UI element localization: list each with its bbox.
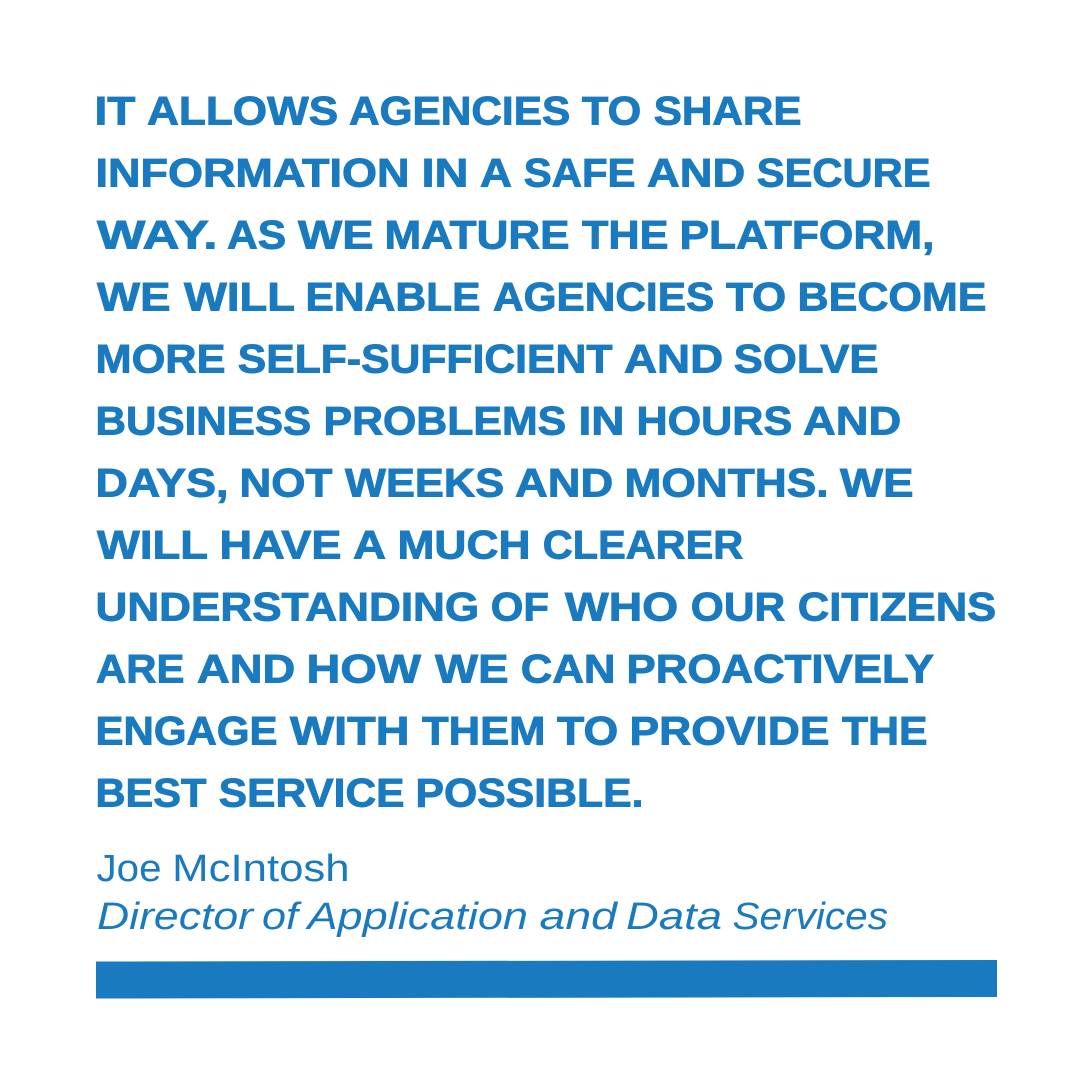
quote line 10: PROACTIVELY [626, 648, 934, 692]
quote line 7: WE [840, 462, 914, 506]
quote line 8: WILL [97, 524, 208, 568]
quote line 6: AND [803, 400, 901, 444]
quote line 3: WE [298, 214, 374, 258]
quote line 11: ENGAGE [96, 710, 278, 754]
quote line 1: TO [582, 90, 641, 134]
accent bar [96, 960, 997, 998]
quote line 2: A [480, 152, 512, 196]
quote line 4: TO [726, 276, 786, 320]
quote line 2: INFORMATION [96, 152, 410, 196]
quote line 6 [96, 400, 901, 444]
attribution: speaker role: Director [97, 896, 255, 938]
quote line 9: OUR [691, 586, 785, 630]
quote line 7: DAYS, [96, 462, 228, 506]
attribution: speaker role: of [262, 896, 302, 938]
quote line 8: A [353, 524, 386, 568]
attribution: speaker role: Application [305, 896, 528, 938]
quote line 6: IN [578, 400, 624, 444]
quote line 1 [94, 90, 802, 134]
quote line 7: NOT [240, 462, 332, 506]
quote line 1: IT [94, 90, 135, 134]
quote line 7: MONTHS. [624, 462, 828, 506]
quote line 1: SHARE [654, 90, 802, 134]
attribution: speaker role [97, 896, 888, 938]
quote line 4: WILL [184, 276, 295, 320]
quote line 3: PLATFORM, [680, 214, 934, 258]
quote line 6: HOURS [636, 400, 792, 444]
quote line 11: WITH [290, 710, 410, 754]
quote line 8: CLEARER [543, 524, 743, 568]
quote line 3 [97, 214, 934, 258]
quote line 1: AGENCIES [349, 90, 570, 134]
quote line 11: THEM [422, 710, 546, 754]
quote line 4: BECOME [798, 276, 986, 320]
quote line 12: POSSIBLE. [416, 772, 644, 816]
attribution: speaker role: and [540, 896, 619, 938]
quote line 3: THE [582, 214, 668, 258]
quote line 12: SERVICE [219, 772, 404, 816]
quote line 1: ALLOWS [147, 90, 338, 134]
quote line 9: CITIZENS [798, 586, 996, 630]
quote line 11: PROVIDE [630, 710, 830, 754]
quote line 8 [97, 524, 743, 568]
quote line 10: CAN [521, 648, 616, 692]
quote line 8: HAVE [220, 524, 342, 568]
quote line 11 [96, 710, 928, 754]
quote line 12 [96, 772, 644, 816]
attribution: speaker role: Data [626, 896, 722, 938]
quote line 4: WE [97, 276, 170, 320]
quote line 9: OF [491, 586, 549, 630]
quote line 3: AS [227, 214, 286, 258]
quote line 7: AND [515, 462, 613, 506]
quote line 2 [96, 152, 930, 196]
quote line 8: MUCH [398, 524, 530, 568]
quote line 11: TO [557, 710, 618, 754]
attribution: speaker role: Services [732, 896, 888, 938]
quote line 10: WE [435, 648, 508, 692]
attribution: speaker name [96, 848, 350, 890]
quote line 10: HOW [306, 648, 421, 692]
quote line 4: AGENCIES [493, 276, 714, 320]
quote line 2: SECURE [757, 152, 930, 196]
quote line 5: MORE [96, 338, 226, 382]
quote line 4: ENABLE [306, 276, 480, 320]
quote line 5 [96, 338, 878, 382]
quote line 3: MATURE [384, 214, 570, 258]
quote line 2: IN [422, 152, 468, 196]
quote line 10 [96, 648, 934, 692]
quote line 7: WEEKS [345, 462, 504, 506]
quote line 10: ARE [96, 648, 184, 692]
quote line 12: BEST [96, 772, 206, 816]
quote line 4 [97, 276, 986, 320]
quote line 2: AND [647, 152, 745, 196]
quote line 10: AND [197, 648, 295, 692]
quote line 5: SOLVE [734, 338, 878, 382]
quote line 6: PROBLEMS [324, 400, 566, 444]
quote line 3: WAY. [97, 214, 218, 258]
quote line 6: BUSINESS [96, 400, 311, 444]
quote line 5: SELF-SUFFICIENT [238, 338, 612, 382]
attribution: speaker name: Joe [96, 848, 162, 890]
quote line 9 [96, 586, 996, 630]
attribution: speaker name: McIntosh [172, 848, 350, 890]
quote line 5: AND [624, 338, 723, 382]
quote line 9: WHO [565, 586, 678, 630]
quote line 2: SAFE [524, 152, 636, 196]
quote line 11: THE [842, 710, 928, 754]
quote text block [94, 90, 996, 816]
quote line 9: UNDERSTANDING [96, 586, 479, 630]
quote line 7 [96, 462, 914, 506]
